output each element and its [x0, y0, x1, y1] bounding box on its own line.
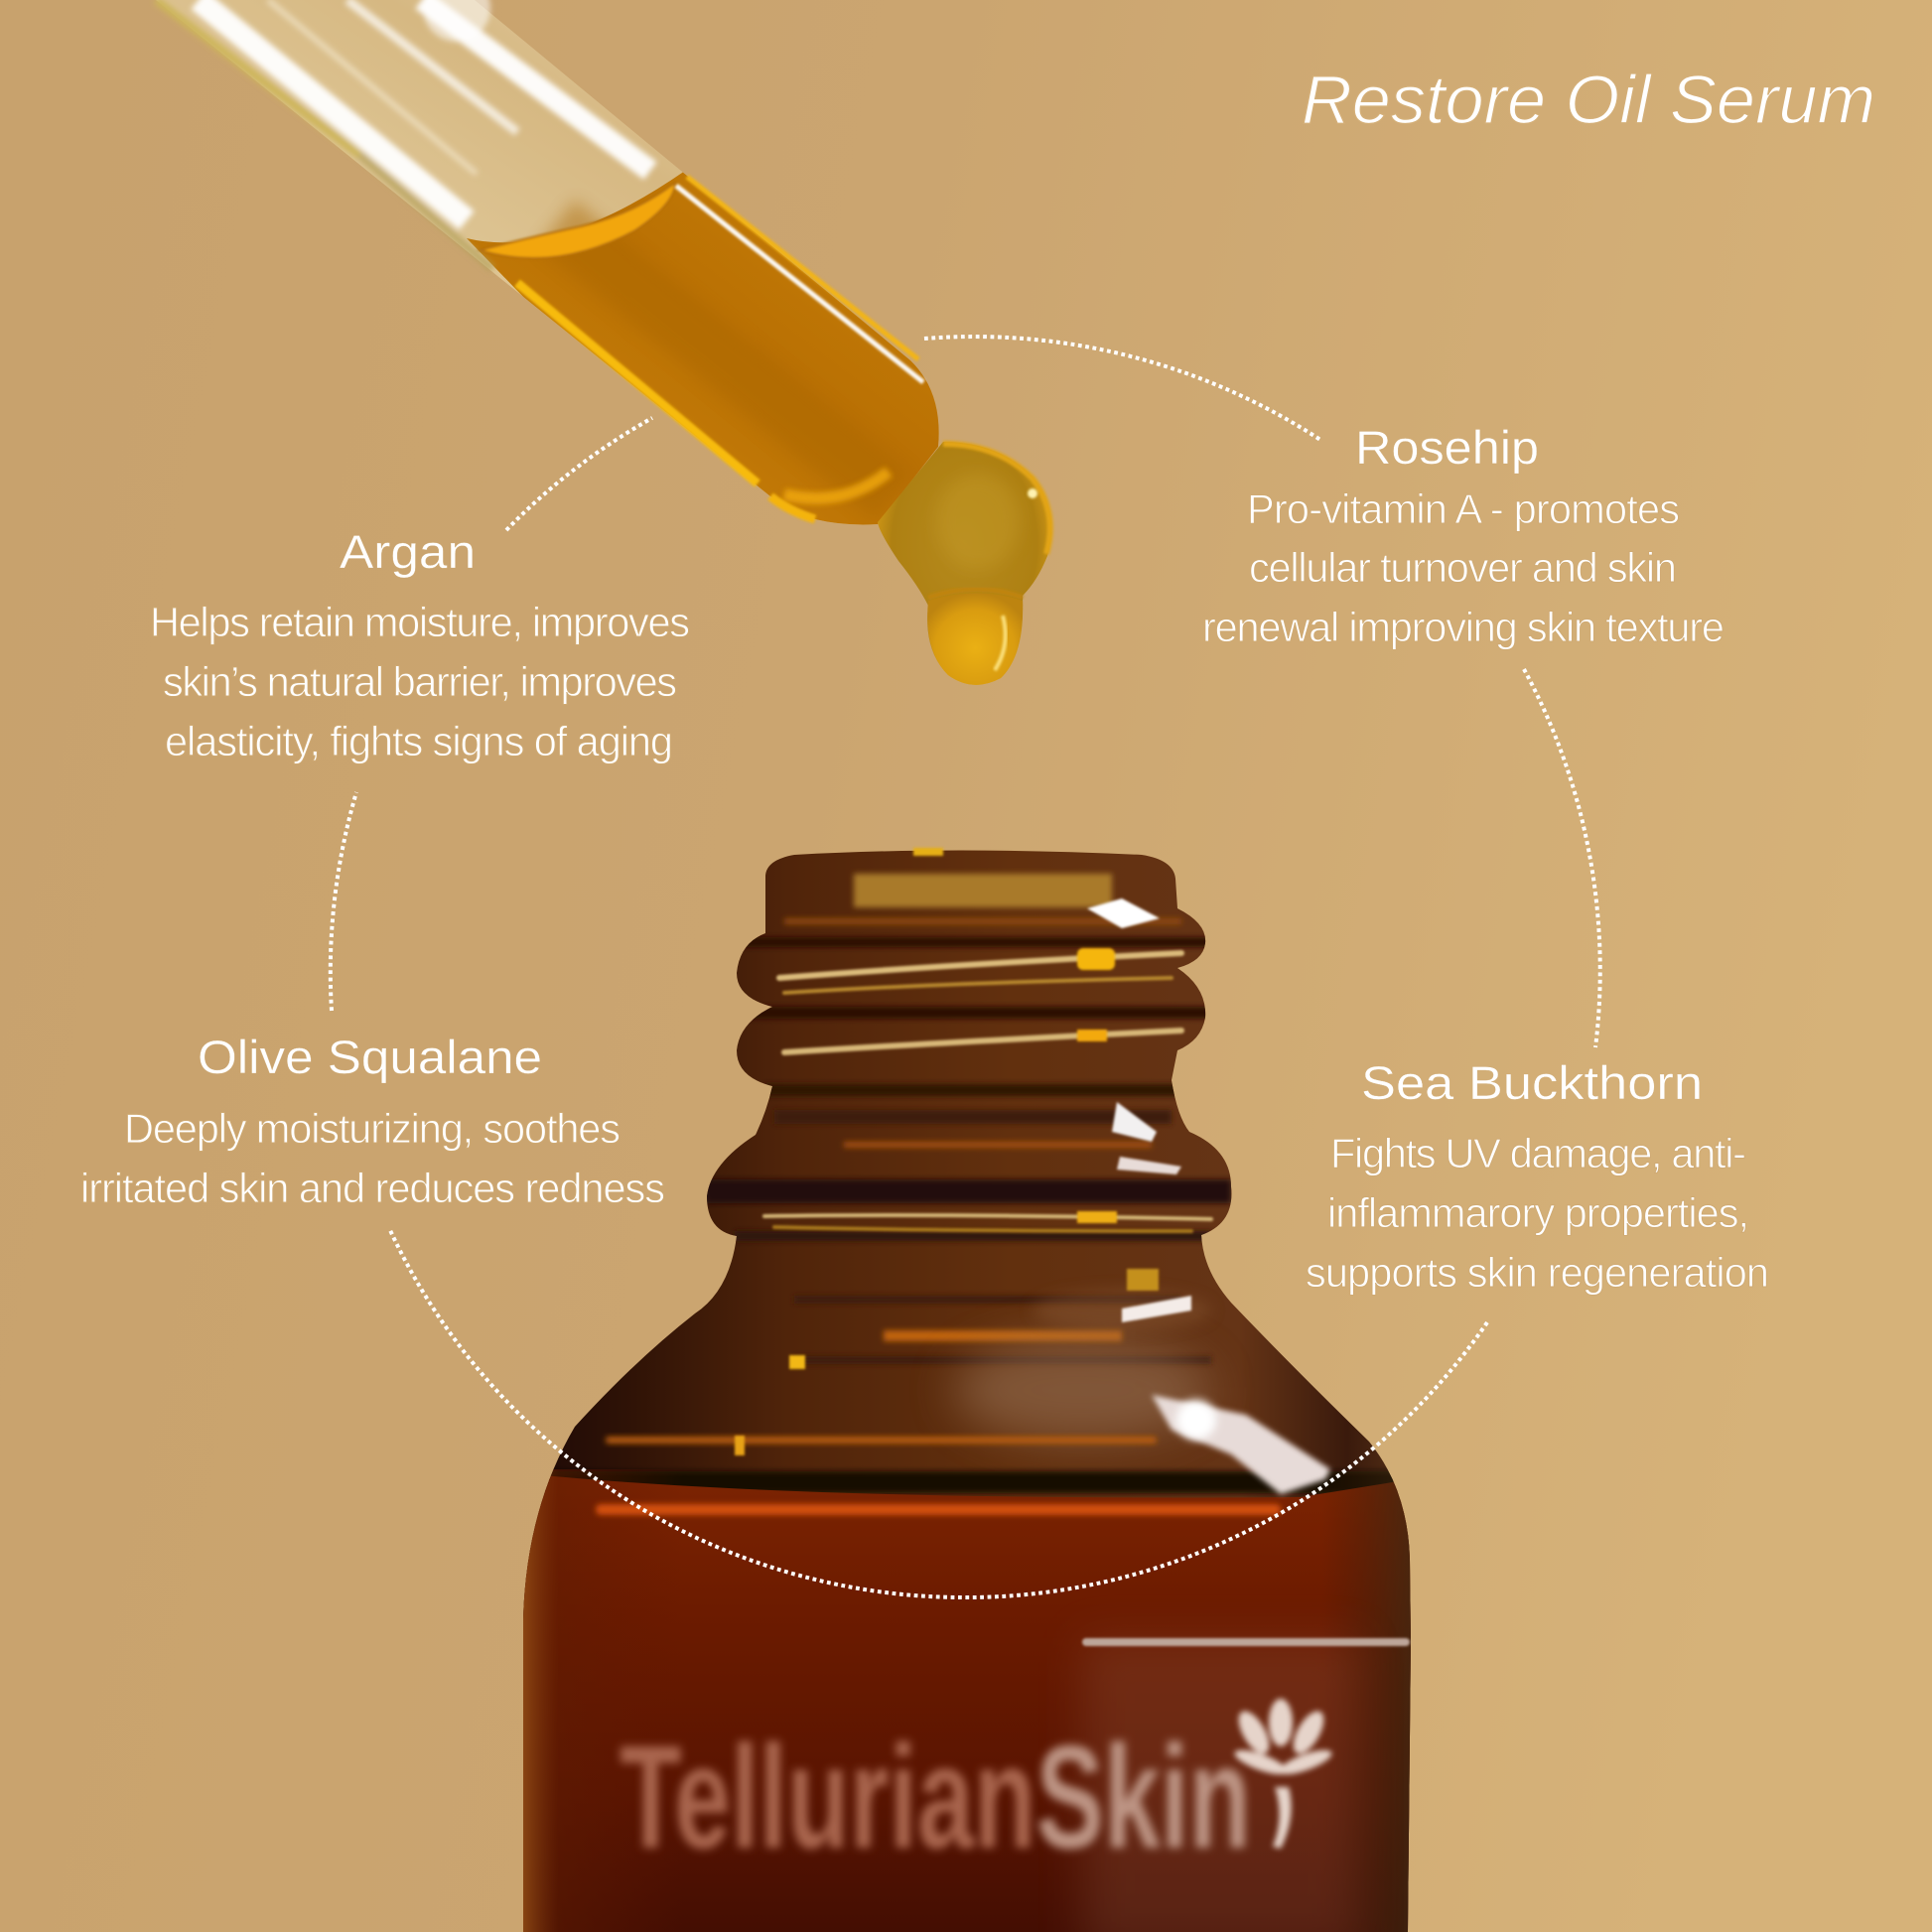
panel: sea buckthorn: [1306, 1056, 1769, 1296]
description: olive squalane: irritated skin and reduces redness: [80, 1165, 665, 1211]
title: Restore Oil Serum: [1302, 62, 1875, 138]
description: olive squalane: [80, 1105, 665, 1211]
arc: top left: [506, 418, 652, 530]
heading: argan: Argan: [340, 525, 476, 578]
description: argan: Helps retain moisture, improves: [150, 599, 690, 645]
description: sea buckthorn: [1306, 1130, 1769, 1296]
glass highlights: [735, 848, 1410, 1646]
arc: left: [331, 792, 356, 1011]
arc: right: [1524, 669, 1600, 1047]
logo wordmark: TellurianSkin: [620, 1716, 1251, 1879]
panel: argan: [150, 525, 690, 764]
arc: top right: [924, 337, 1320, 440]
heading: olive squalane: Olive Squalane: [198, 1031, 542, 1083]
oil column: [467, 171, 953, 536]
description: sea buckthorn: inflammarory properties,: [1327, 1189, 1749, 1236]
oil surface meniscus: [480, 183, 675, 258]
description: argan: elasticity, fights signs of aging: [165, 718, 673, 764]
description: olive squalane: Deeply moisturizing, soothes: [124, 1105, 621, 1152]
description: rosehip: Pro-vitamin A - promotes: [1247, 485, 1680, 532]
label: Tellurian Skin: [620, 1699, 1334, 1879]
description: sea buckthorn: supports skin regeneration: [1306, 1249, 1769, 1296]
description: rosehip: renewal improving skin texture: [1202, 604, 1725, 650]
oil droplet: [878, 442, 1051, 685]
description: sea buckthorn: Fights UV damage, anti-: [1330, 1130, 1746, 1176]
dropper glass section: [139, 0, 963, 536]
dotted circle: [331, 337, 1600, 1597]
icon: plant: [1232, 1699, 1334, 1849]
panel: rosehip: [1202, 421, 1725, 650]
heading: rosehip: Rosehip: [1355, 421, 1539, 474]
panel: olive squalane: [80, 1031, 665, 1211]
dropper: [139, 0, 1051, 685]
thread streaks: [764, 953, 1211, 1231]
arc: bottom: [389, 1228, 1487, 1597]
description: rosehip: cellular turnover and skin: [1249, 544, 1677, 591]
glass highlights: [156, 0, 650, 269]
heading: sea buckthorn: Sea Buckthorn: [1361, 1056, 1703, 1109]
description: rosehip: [1202, 485, 1725, 650]
bottle glass body: [516, 849, 1420, 1932]
bottle: [516, 848, 1420, 1932]
description: argan: [150, 599, 690, 764]
description: argan: skin’s natural barrier, improves: [163, 658, 677, 705]
